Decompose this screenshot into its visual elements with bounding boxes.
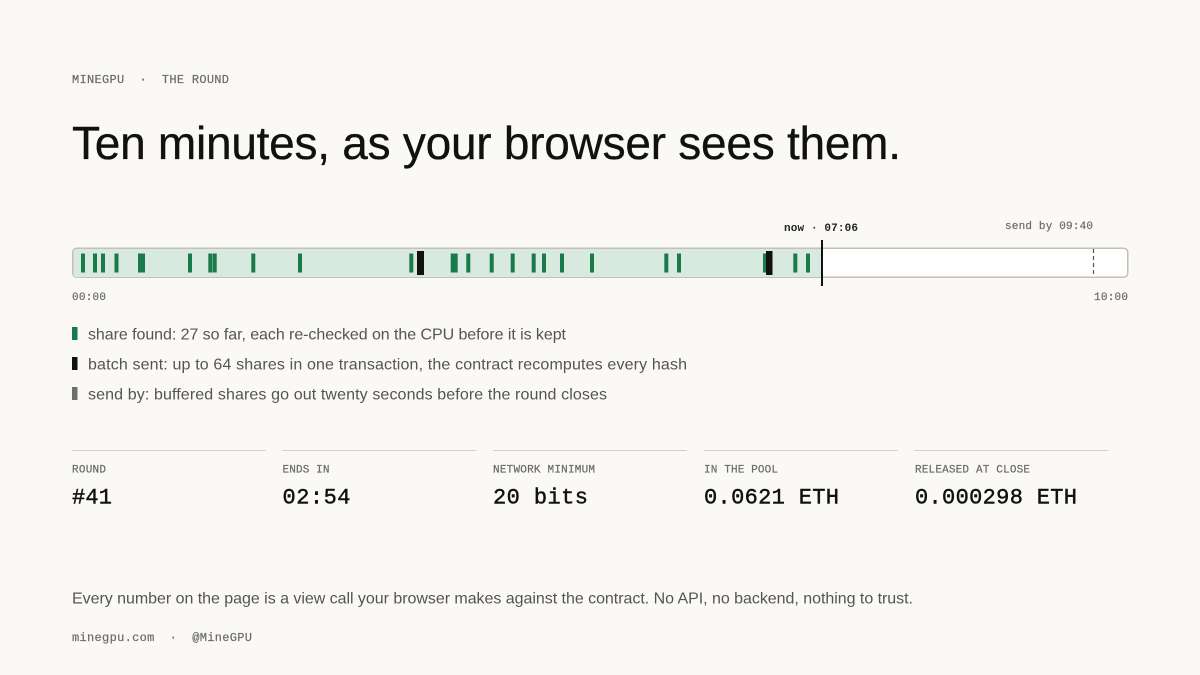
stat: in the pool: IN THE POOL <box>704 464 778 476</box>
stat: round: ROUND <box>72 464 106 476</box>
legend <box>72 326 687 404</box>
legend: share found: share found: 27 so far, each re-checked on the CPU before it is kept <box>88 326 567 344</box>
stats row <box>72 450 1108 510</box>
elapsed region <box>74 249 822 277</box>
stat: ends in: ENDS IN <box>282 464 330 476</box>
footer links: minegpu.com · @MineGPU <box>72 631 252 645</box>
share ticks <box>81 254 810 272</box>
batch markers <box>417 251 772 275</box>
legend: send by: send by: buffered shares go out twenty seconds before the round closes <box>88 386 607 404</box>
now label: now · 07:06 <box>784 223 858 235</box>
title: Ten minutes, as your browser sees them. <box>72 117 901 169</box>
stat: ends in <box>282 450 476 510</box>
axis start: 00:00 <box>72 292 106 304</box>
send by marker <box>1092 249 1094 277</box>
stat: in the pool <box>704 450 898 510</box>
legend: batch sent: batch sent: up to 64 shares in one transaction, the contract recomputes every hash <box>88 356 687 374</box>
send by label: send by 09:40 <box>1005 221 1093 233</box>
eyebrow: MINEGPU · THE ROUND <box>72 73 229 87</box>
stat: round: #41 <box>72 486 112 510</box>
stat: released at close <box>914 450 1108 510</box>
stat: network minimum <box>493 450 687 510</box>
stat: network minimum: 20 bits <box>493 486 588 510</box>
now marker <box>821 240 823 286</box>
timeline <box>73 240 1128 286</box>
axis end: 10:00 <box>1094 292 1128 304</box>
stat: ends in: 02:54 <box>282 486 350 510</box>
footnote: Every number on the page is a view call your browser makes against the contract. No API, no backend, nothing to trust. <box>72 590 913 608</box>
timeline track <box>73 248 1128 277</box>
stat: in the pool: 0.0621 ETH <box>704 486 839 510</box>
stat: released at close: RELEASED AT CLOSE <box>915 464 1030 476</box>
stat: round <box>72 450 266 510</box>
stat: released at close: 0.000298 ETH <box>915 486 1077 510</box>
stat: network minimum: NETWORK MINIMUM <box>493 464 595 476</box>
